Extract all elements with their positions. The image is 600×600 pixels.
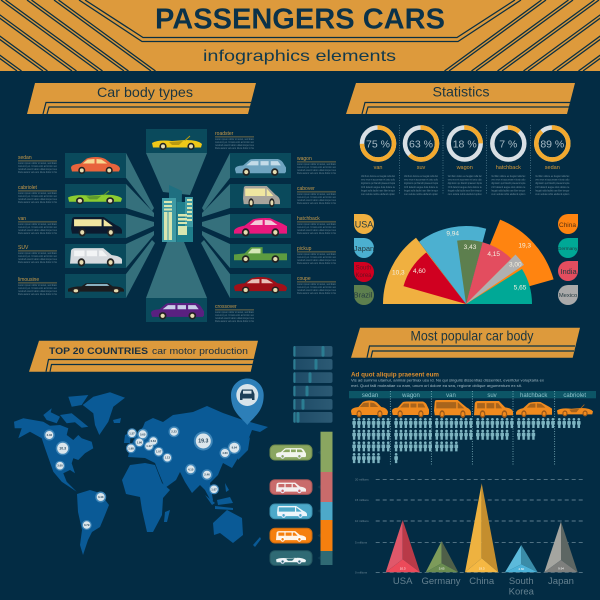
legend: countries left [354, 214, 374, 305]
map pins: 1.98 [128, 446, 134, 450]
chart: semicircular country production: 3,43 [464, 244, 477, 251]
column header band: sedan [362, 393, 378, 399]
map pins: 19.3 [198, 438, 208, 444]
legend: countries left: Korea [355, 273, 372, 279]
label: hatchback: hatchback [297, 216, 320, 222]
donut: wagon 18%: 18 % [453, 138, 477, 150]
pyramid: Germany: 5.65 [439, 566, 445, 570]
banner: most popular car body [351, 328, 580, 358]
map pins: 1.17 [146, 444, 152, 448]
description: Vis ad summo utamur, animal pertinax usu id. No qui singulis dissentias dissentiet, everitdur voluptaria ex [351, 378, 544, 382]
axis labels: Germany [421, 576, 461, 587]
donut: suv 63%: suv [417, 165, 426, 171]
axis labels: South [509, 576, 534, 587]
map pins: 2.23 [171, 430, 177, 434]
label: coupe [297, 276, 337, 295]
pill: sedan [270, 445, 312, 460]
label: van [18, 216, 58, 235]
donut: sedan 89%: sedan [545, 165, 560, 171]
donut: sedan 89%: 89 % [540, 138, 564, 150]
label: cabriolet [18, 185, 58, 204]
car: pickup [234, 247, 287, 263]
chart: semicircular country production: 19,3 [518, 242, 531, 250]
label: limousine [18, 277, 58, 296]
pill: suv [270, 480, 312, 494]
label: van: van [18, 216, 26, 222]
panel: donut statistics [361, 125, 570, 196]
legend: countries left: USA [355, 220, 373, 230]
map pins: 1.57 [129, 431, 135, 435]
map pins: 10.3 [59, 446, 66, 450]
label: coupe: coupe [297, 276, 311, 282]
map pins: 2.46 [47, 433, 52, 437]
chart: pyramid production: 5 millions [355, 540, 368, 544]
map pins: 1.13 [165, 456, 170, 460]
axis labels: China [469, 576, 495, 587]
chart: semicircular country production: 10,3 [392, 270, 405, 276]
banner: most popular car body: Most popular car body [410, 328, 534, 344]
pyramid: South Korea [505, 545, 538, 572]
banner: statistics [346, 83, 575, 114]
column header band: van [446, 393, 456, 399]
car: sedan [71, 157, 120, 174]
map pins: 1.07 [211, 487, 217, 491]
legend: countries right: India [560, 267, 577, 276]
pill: hatchback [270, 528, 312, 543]
chart: pyramid production: 10 millions [355, 519, 369, 523]
chart: semicircular country production: 3,00 [509, 262, 522, 268]
column header band: cabriolet [563, 393, 586, 399]
car: coupe [234, 277, 287, 293]
banner: top 20 countries: TOP 20 COUNTRIES [49, 346, 148, 357]
banner: top 20 countries [29, 341, 258, 372]
pill: cabriolet [270, 551, 312, 565]
panel: car body types [18, 129, 337, 323]
label: cabriolet: cabriolet [18, 185, 38, 191]
donut: van 75% [361, 128, 395, 196]
header band [0, 0, 600, 71]
column header band: wagon [401, 393, 420, 399]
car tiles [65, 129, 291, 322]
pyramid: China: 19.3 [479, 566, 485, 570]
pyramid: USA [386, 520, 420, 572]
pyramid: China [465, 483, 498, 572]
light rays to the city [126, 153, 230, 298]
banner: top 20 countries: car motor production [152, 346, 248, 357]
car: SUV [70, 248, 122, 267]
pictogram: people counts [352, 418, 581, 463]
chart: pyramid production: 0 millions [355, 570, 368, 574]
label: hatchback [297, 216, 337, 235]
label: pickup [297, 246, 337, 265]
label: roadster [215, 131, 255, 150]
label: crossover: crossover [215, 304, 237, 310]
chart: pyramid production [355, 478, 584, 598]
legend: countries right [558, 214, 578, 305]
map: world [14, 378, 268, 555]
map pins: 1.96 [137, 440, 142, 444]
pill: van [270, 504, 312, 519]
label: SUV [18, 245, 58, 264]
big map marker with car [231, 378, 264, 425]
axis labels: Korea [509, 586, 535, 598]
description [351, 378, 544, 388]
chart: stacked bar with car pills [270, 432, 332, 565]
pyramid: USA: 10.3 [400, 566, 406, 570]
label: pickup: pickup [297, 246, 312, 252]
legend: countries right: Germany [558, 246, 578, 252]
title: PASSENGERS CARS [155, 4, 445, 36]
donut: wagon 18% [448, 128, 482, 196]
car: crossover [151, 303, 204, 320]
chart: semicircular country production: 4,60 [413, 268, 426, 275]
map pins: 3.00 [57, 464, 63, 468]
map pins: 9.94 [232, 446, 237, 450]
car: roadster [152, 136, 202, 150]
map pins: 5.65 [140, 432, 146, 436]
subtitle: infographics elements [203, 48, 396, 65]
car: wagon [235, 159, 286, 176]
label: limousine: limousine [18, 277, 39, 283]
column header band [349, 391, 596, 399]
label: roadster: roadster [215, 131, 234, 137]
pyramid: South Korea: 4.60 [518, 567, 525, 571]
icon: city buildings [162, 185, 193, 242]
legend: countries left: South [356, 266, 371, 272]
map pins: 2.46 [204, 473, 210, 477]
donut: sedan 89% [535, 128, 570, 196]
pyramid: Germany [426, 541, 458, 572]
chart: semicircular country production [383, 220, 554, 304]
banner: car body types [27, 83, 256, 114]
chart: pyramid production: 15 millions [355, 498, 369, 502]
donut: van 75%: 75 % [366, 138, 390, 150]
donut: hatchback 7%: hatchback [496, 165, 521, 171]
pyramid: Japan [544, 522, 578, 572]
legend: countries right: China [559, 222, 576, 229]
label: crossover [215, 304, 255, 323]
label: sedan [18, 155, 58, 174]
car: van [71, 217, 122, 237]
donut: wagon 18%: wagon [456, 165, 473, 171]
chart: semicircular country production: 5,65 [514, 284, 527, 292]
orange car row [351, 400, 593, 418]
donut: hatchback 7%: 7 % [499, 138, 517, 150]
map pins: 0.79 [84, 523, 90, 527]
map pins: 4.15 [188, 467, 194, 471]
banner: car body types: Car body types [97, 84, 193, 100]
label: sedan: sedan [18, 155, 32, 161]
axis labels [393, 576, 574, 598]
car: cabover [243, 186, 280, 207]
donut: van 75%: van [374, 165, 382, 171]
column header band: suv [487, 393, 497, 399]
panel: horizontal progress bars [293, 346, 332, 423]
legend: countries left: Japan [354, 244, 374, 253]
legend: countries right: Mexico [559, 293, 577, 299]
car: hatchback [234, 218, 287, 237]
banner: statistics: Statistics [432, 84, 490, 100]
description: mei. Quot falli moleatiae cu eam, unum orl dolore ea sea, regione oblique argumentum ex sit. [351, 384, 522, 388]
heading: Ad quot aliquip praesent eum [351, 372, 439, 378]
map pins: 4.60 [222, 451, 228, 455]
chart: semicircular country production: 4,15 [487, 251, 500, 258]
donut: suv 63% [404, 128, 438, 196]
chart: pyramid production: 20 millions [355, 478, 369, 482]
label: cabover [297, 186, 337, 205]
donut: suv 63%: 63 % [409, 138, 433, 150]
label: cabover: cabover [297, 186, 315, 192]
map pins: 1.07 [156, 450, 162, 454]
label: wagon [297, 156, 337, 175]
chart: semicircular country production: 9,94 [446, 230, 459, 238]
label: SUV: SUV [18, 245, 29, 251]
map pins: 3.43 [98, 495, 104, 499]
axis labels: USA [393, 576, 413, 587]
car: cabriolet [68, 191, 122, 204]
car: limousine [68, 283, 124, 294]
pyramid: Japan: 9.94 [558, 566, 564, 570]
legend: countries left: Brazil [354, 290, 373, 300]
map pins: 0.64 [151, 439, 156, 443]
panel: most popular table [349, 372, 596, 465]
map pins [44, 426, 241, 530]
donut: hatchback 7% [491, 128, 526, 196]
column header band: hatchback [520, 393, 548, 399]
axis labels: Japan [548, 576, 574, 587]
label: wagon: wagon [297, 156, 312, 162]
